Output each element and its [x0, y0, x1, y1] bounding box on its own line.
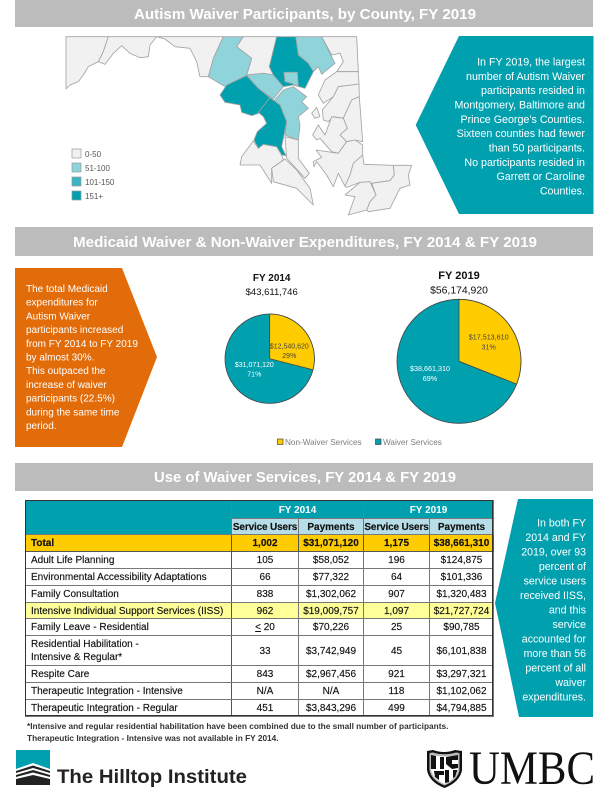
callout: IISS share: percent of all	[525, 662, 586, 674]
pie chart: FY 2019: $38,661,310	[410, 364, 450, 373]
pie chart: FY 2019: $17,513,610	[469, 332, 509, 342]
table: use of waiver services: Residential Habilitation -	[31, 638, 139, 650]
table: use of waiver services: Service Users	[364, 522, 429, 532]
table: use of waiver services: 45	[391, 646, 402, 656]
table: use of waiver services: 64	[391, 572, 402, 583]
callout: largest county participation: Montgomery, Baltimore and	[455, 100, 585, 112]
callout: IISS share: percent of	[539, 561, 586, 573]
table: use of waiver services: 962	[257, 606, 273, 616]
table: use of waiver services: $2,967,456	[306, 669, 356, 680]
table: use of waiver services: 196	[388, 555, 405, 566]
heading: autism waiver participants by county: Autism Waiver Participants, by County, FY 2019	[134, 6, 476, 23]
table: use of waiver services: Family Leave - Residential	[31, 622, 149, 633]
table: use of waiver services: $6,101,838	[436, 646, 487, 656]
callout: IISS share: waiver	[554, 677, 586, 689]
table: use of waiver services: $4,794,885	[436, 703, 487, 714]
table: use of waiver services: $19,009,757	[303, 606, 359, 616]
callout: largest county participation: Prince George’s Counties.	[460, 114, 585, 126]
callout: expenditure growth: The total Medicaid	[26, 284, 108, 295]
table: use of waiver services: 451	[257, 703, 273, 714]
table: use of waiver services: $101,336	[441, 572, 482, 583]
callout: IISS share: In both FY	[537, 518, 586, 530]
table: use of waiver services: 66	[259, 572, 271, 583]
callout: largest county participation: number of Autism Waiver	[466, 71, 585, 83]
table: use of waiver services: 499	[388, 703, 405, 714]
table: use of waiver services: $58,052	[313, 555, 349, 566]
table: use of waiver services: Family Consultation	[31, 589, 119, 600]
table: use of waiver services: Payments	[438, 522, 485, 532]
table: use of waiver services: 1,097	[384, 606, 409, 616]
pie chart: FY 2019: FY 2019	[438, 270, 480, 282]
logo: UMBC	[427, 742, 595, 792]
callout: expenditure growth: from FY 2014 to FY 2019	[26, 339, 138, 350]
callout: IISS share	[495, 499, 593, 717]
callout: largest county participation: No participants resided in	[464, 157, 585, 169]
heading: use of waiver services: Use of Waiver Services, FY 2014 & FY 2019	[154, 469, 456, 486]
pie legend: Non-Waiver Services	[285, 438, 362, 447]
table: use of waiver services: Respite Care	[31, 669, 89, 680]
table: use of waiver services: Adult Life Planning	[31, 555, 114, 566]
table: use of waiver services: Therapeutic Integration - Intensive	[31, 686, 183, 697]
table: use of waiver services: 1,175	[384, 538, 409, 549]
pie chart: FY 2014: 29%	[282, 353, 296, 360]
table: use of waiver services: $77,322	[313, 572, 349, 583]
table: use of waiver services: < 20	[255, 622, 275, 633]
table: use of waiver services: 105	[257, 555, 273, 566]
table: use of waiver services: $38,661,310	[434, 538, 489, 549]
callout: largest county participation: than 50 participants.	[489, 142, 585, 154]
table: use of waiver services: 838	[257, 589, 273, 600]
table: use of waiver services: $3,843,296	[306, 703, 356, 714]
table: use of waiver services: 25	[391, 622, 402, 633]
footnote: residential habilitation: *Intensive and regular residential habilitation have been combined due to the small number of participants.	[27, 721, 448, 731]
map legend: 51-100	[85, 164, 110, 173]
callout: expenditure growth: increase of waiver	[26, 380, 107, 391]
pie chart: FY 2014: $31,071,120	[235, 362, 274, 369]
pie chart: FY 2019: 31%	[482, 342, 496, 352]
callout: expenditure growth: Autism Waiver	[26, 311, 91, 322]
table: use of waiver services: 1,002	[252, 538, 278, 549]
callout: expenditure growth: participants (22.5%)	[26, 394, 115, 405]
heading: autism waiver participants by county	[15, 0, 593, 27]
pie chart: FY 2019: 69%	[423, 374, 438, 383]
table: use of waiver services: FY 2014	[279, 504, 316, 516]
callout: expenditure growth	[15, 268, 157, 447]
callout: largest county participation	[416, 36, 594, 214]
heading: use of waiver services	[15, 463, 593, 491]
callout: expenditure growth: participants increased	[26, 325, 123, 336]
table: use of waiver services: $90,785	[443, 622, 480, 633]
callout: expenditure growth: by almost 30%.	[26, 352, 94, 364]
pie chart: FY 2014: FY 2014	[253, 273, 291, 284]
callout: expenditure growth: during the same time	[26, 407, 120, 418]
map legend: 0-50	[85, 150, 102, 159]
callout: expenditure growth: period.	[26, 421, 57, 432]
callout: IISS share: 2019, over 93	[521, 546, 586, 558]
table: use of waiver services: 33	[259, 646, 271, 656]
map legend: 101-150	[85, 178, 115, 187]
callout: largest county participation: Sixteen counties had fewer	[457, 128, 585, 140]
table: use of waiver services: 907	[388, 589, 405, 600]
callout: IISS share: expenditures.	[522, 692, 586, 704]
table: use of waiver services: 118	[389, 686, 404, 697]
table: use of waiver services	[25, 500, 494, 717]
heading: Medicaid expenditures: Medicaid Waiver & Non-Waiver Expenditures, FY 2014 & FY 2019	[73, 234, 537, 251]
callout: expenditure growth: expenditures for	[26, 298, 98, 309]
table: use of waiver services: $3,297,321	[436, 669, 487, 680]
table: use of waiver services: $21,727,724	[434, 606, 489, 616]
map legend: 151+	[85, 192, 103, 201]
table: use of waiver services: Intensive Individual Support Services (IISS)	[31, 606, 223, 616]
table: use of waiver services: Service Users	[233, 522, 297, 532]
callout: largest county participation: participants resided in	[481, 85, 585, 97]
table: use of waiver services: 843	[257, 669, 273, 680]
pie chart: FY 2014: $43,611,746	[246, 287, 298, 298]
footnote: therapeutic integration: Therapeutic Integration - Intensive was not available in FY 2014.	[27, 733, 279, 743]
table: use of waiver services: N/A	[323, 686, 339, 697]
logo: The Hilltop Institute: The Hilltop Institute	[57, 767, 247, 788]
callout: IISS share: service users	[524, 576, 586, 588]
callout: IISS share: more than 56	[524, 648, 586, 660]
table: use of waiver services: $1,302,062	[306, 589, 356, 600]
callout: expenditure growth: This outpaced the	[26, 366, 106, 377]
pie chart: FY 2019	[397, 270, 521, 423]
map legend	[72, 149, 115, 201]
table: use of waiver services: N/A	[257, 686, 273, 697]
table: use of waiver services: Total	[31, 538, 54, 549]
callout: IISS share: received IISS,	[520, 590, 586, 602]
table: use of waiver services: 921	[388, 669, 405, 680]
pie chart: FY 2019: $56,174,920	[430, 286, 488, 296]
table: use of waiver services: $1,102,062	[436, 686, 487, 697]
table: use of waiver services: $3,742,949	[306, 646, 356, 656]
table: use of waiver services: Therapeutic Integration - Regular	[31, 703, 178, 714]
map: Maryland counties	[66, 37, 412, 215]
callout: IISS share: 2014 and FY	[525, 532, 586, 544]
heading: Medicaid expenditures	[15, 227, 593, 256]
table: use of waiver services: $31,071,120	[303, 538, 359, 549]
callout: IISS share: accounted for	[522, 634, 586, 646]
callout: largest county participation: Counties.	[540, 186, 585, 198]
pie chart: FY 2014: $12,540,620	[270, 344, 309, 350]
table: use of waiver services: Environmental Accessibility Adaptations	[31, 572, 207, 583]
pie legend: Waiver Services	[383, 438, 442, 447]
table: use of waiver services: Intensive & Regular*	[31, 652, 122, 663]
table: use of waiver services: $70,226	[313, 622, 349, 633]
callout: IISS share: service	[552, 619, 586, 631]
callout: largest county participation: In FY 2019, the largest	[477, 56, 585, 68]
table: use of waiver services: $124,875	[441, 555, 482, 566]
pie legend	[278, 438, 442, 447]
callout: IISS share: and this	[549, 604, 586, 616]
logo: The Hilltop Institute	[16, 750, 247, 788]
pie chart: FY 2014: 71%	[247, 372, 261, 378]
table: use of waiver services: $1,320,483	[436, 589, 487, 600]
table: use of waiver services: FY 2019	[410, 504, 447, 516]
table: use of waiver services: Payments	[307, 522, 355, 532]
callout: largest county participation: Garrett or Caroline	[496, 171, 585, 183]
pie chart: FY 2014	[225, 273, 314, 403]
